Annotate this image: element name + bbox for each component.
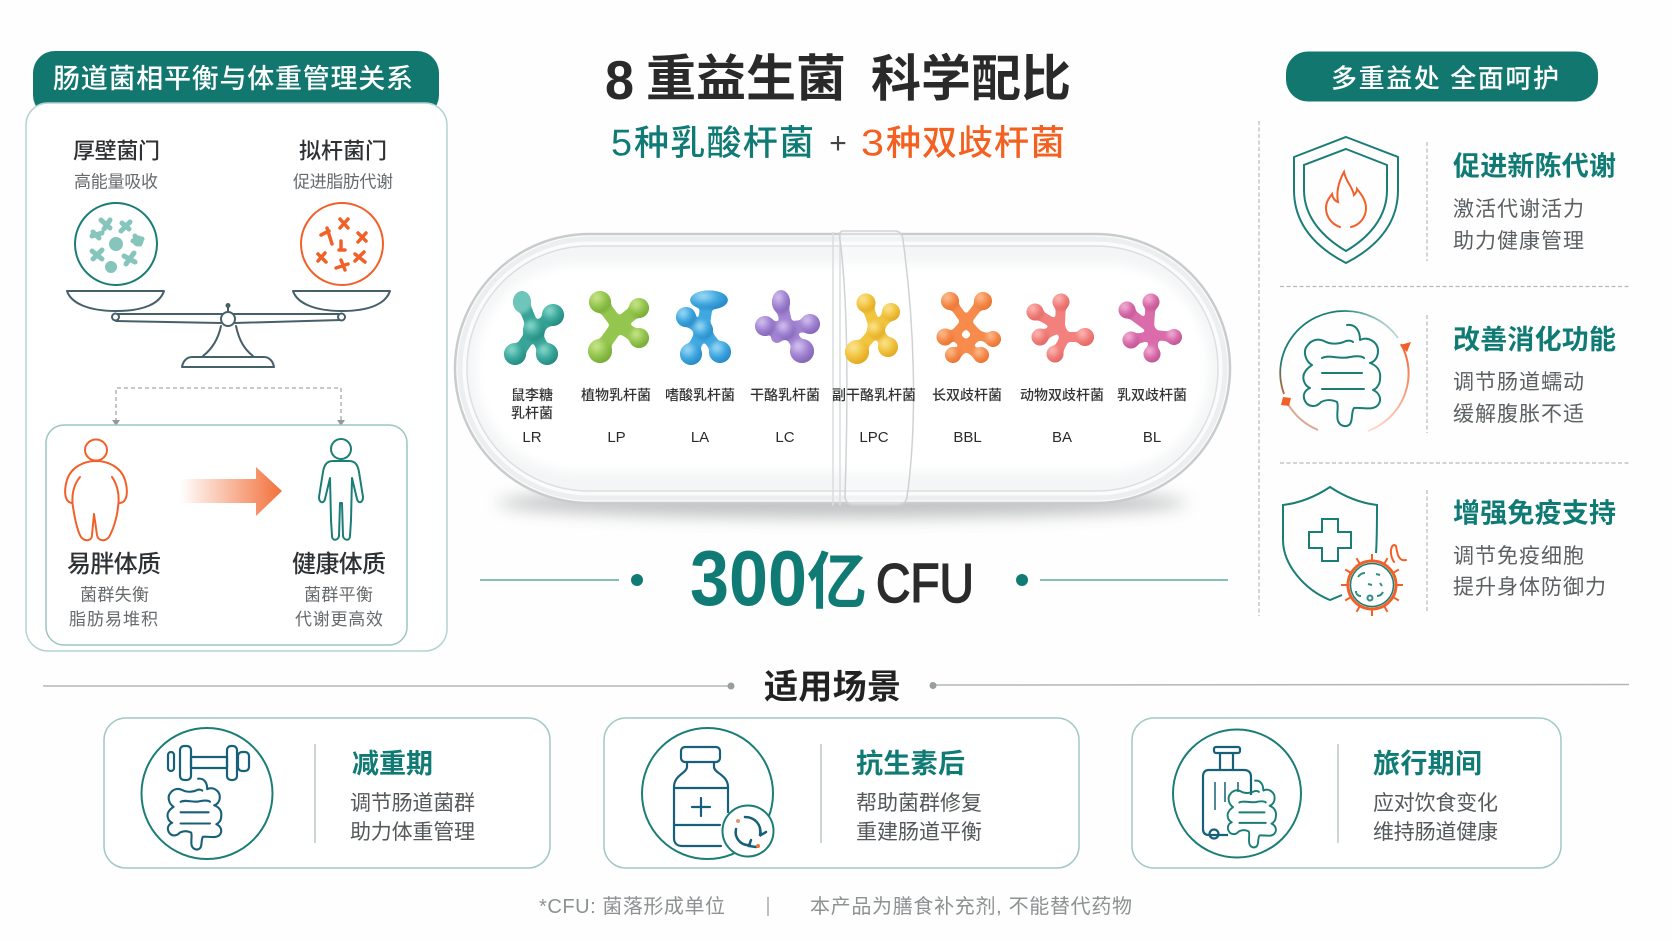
benefits heading pill: 多重益处 全面呵护 bbox=[1331, 64, 1559, 94]
icon: shield with flame bbox=[1294, 137, 1398, 263]
subtitle: 5 bbox=[611, 122, 632, 164]
Firmicutes label: 厚壁菌门 bbox=[73, 138, 160, 163]
footnote: 本产品为膳食补充剂, 不能替代药物 bbox=[810, 895, 1132, 918]
footnote bbox=[539, 895, 1132, 918]
dashed connector arrows bbox=[112, 388, 345, 426]
text: overweight constitution: 脂肪易堆积 bbox=[69, 610, 158, 629]
icon: intestine with ring bbox=[1280, 311, 1411, 431]
strain names: 动物双歧杆菌 bbox=[1020, 387, 1104, 403]
benefit: digestion bbox=[1280, 311, 1616, 431]
strain codes: LA bbox=[691, 429, 709, 446]
text: after antibiotics: 帮助菌群修复 bbox=[856, 792, 982, 815]
strain names: 植物乳杆菌 bbox=[581, 387, 651, 403]
text: immunity bbox=[1453, 498, 1616, 599]
text: after antibiotics: 抗生素后 bbox=[856, 749, 965, 779]
text: digestion: 缓解腹胀不适 bbox=[1453, 403, 1584, 426]
text: healthy constitution: 菌群平衡 bbox=[304, 586, 373, 604]
strain names: 干酪乳杆菌 bbox=[750, 387, 820, 403]
strain names: 鼠李糖 bbox=[511, 387, 553, 403]
section heading: scenarios: 适用场景 bbox=[764, 668, 901, 706]
dose callout: 30 billion CFU: CFU bbox=[876, 552, 974, 614]
text: overweight constitution: 易胖体质 bbox=[67, 551, 161, 578]
text: metabolism: 助力健康管理 bbox=[1453, 230, 1584, 253]
text: healthy constitution bbox=[292, 551, 386, 629]
icon: balance scale bbox=[67, 291, 390, 367]
bacterium LP bbox=[588, 291, 649, 363]
text: metabolism: 激活代谢活力 bbox=[1453, 198, 1584, 221]
strain names: 长双歧杆菌 bbox=[932, 387, 1002, 403]
text: healthy constitution: 代谢更高效 bbox=[295, 610, 383, 629]
capsule shadow bbox=[497, 488, 1187, 518]
strain codes: LPC bbox=[859, 429, 889, 446]
benefit: metabolism bbox=[1294, 137, 1616, 263]
text: during travel: 维持肠道健康 bbox=[1373, 821, 1498, 844]
strain names: 乳杆菌 bbox=[511, 405, 553, 421]
Bacteroidetes label bbox=[293, 138, 393, 192]
panel: gut flora balance and weight bbox=[26, 51, 447, 651]
title bbox=[605, 49, 1071, 111]
strain codes: BL bbox=[1143, 429, 1161, 446]
icon: overweight person bbox=[65, 440, 127, 540]
benefit: immunity bbox=[1283, 487, 1616, 616]
text: metabolism: 促进新陈代谢 bbox=[1453, 151, 1616, 181]
subtitle: 种乳酸杆菌 bbox=[634, 124, 814, 163]
capsule shell bbox=[455, 234, 1230, 503]
strain names: 嗜酸乳杆菌 bbox=[665, 387, 735, 403]
text: during travel: 应对饮食变化 bbox=[1373, 792, 1498, 815]
card: after antibiotics bbox=[604, 718, 1079, 868]
text: during travel bbox=[1373, 749, 1498, 844]
bacterium LPC bbox=[845, 294, 900, 364]
icon: dumbbell and intestine bbox=[142, 728, 272, 859]
strain names bbox=[511, 387, 1187, 421]
text: healthy constitution: 健康体质 bbox=[292, 551, 386, 578]
text: immunity: 调节免疫细胞 bbox=[1453, 545, 1584, 568]
subtitle: 种双歧杆菌 bbox=[886, 124, 1065, 163]
strain names: 副干酪乳杆菌 bbox=[832, 387, 916, 403]
strain codes bbox=[522, 429, 1161, 446]
text: overweight constitution bbox=[67, 551, 161, 629]
arrow: to healthy bbox=[180, 467, 282, 516]
subtitle: 3 bbox=[861, 122, 884, 164]
strain codes: LR bbox=[522, 429, 542, 446]
Bacteroidetes label: 促进脂肪代谢 bbox=[293, 172, 393, 192]
icon: orange bacteria circle bbox=[301, 203, 383, 285]
subtitle bbox=[611, 122, 1065, 164]
text: weight loss: 助力体重管理 bbox=[350, 821, 475, 844]
title: 8 bbox=[605, 49, 634, 111]
panel: benefits bbox=[1259, 52, 1629, 616]
icon: teal bacteria circle bbox=[75, 203, 157, 285]
text: weight loss: 减重期 bbox=[352, 749, 433, 779]
panel body bbox=[26, 103, 447, 651]
section heading: scenarios bbox=[43, 668, 1629, 706]
icon: shield with plus and virus bbox=[1283, 487, 1406, 616]
text: digestion: 改善消化功能 bbox=[1453, 325, 1616, 355]
card: weight loss period bbox=[104, 718, 550, 868]
title: 重益生菌 bbox=[646, 51, 846, 107]
icon: suitcase and intestine bbox=[1173, 730, 1301, 858]
text: digestion bbox=[1453, 325, 1616, 426]
text: immunity: 增强免疫支持 bbox=[1453, 498, 1616, 528]
benefits heading pill bbox=[1286, 52, 1598, 102]
title: 科学配比 bbox=[871, 51, 1071, 107]
text: metabolism bbox=[1453, 151, 1616, 253]
Firmicutes label: 高能量吸收 bbox=[74, 172, 158, 192]
bacterium LR bbox=[504, 291, 564, 365]
text: overweight constitution: 菌群失衡 bbox=[80, 586, 149, 604]
bacterium BL bbox=[1118, 294, 1182, 362]
text: digestion: 调节肠道蠕动 bbox=[1453, 371, 1584, 394]
strain codes: BBL bbox=[953, 429, 982, 446]
icon: bottle with recycle circle bbox=[642, 728, 774, 859]
strain codes: LC bbox=[775, 429, 795, 446]
bacterium BA bbox=[1026, 294, 1094, 362]
bacterium LA bbox=[676, 290, 731, 365]
Bacteroidetes label: 拟杆菌门 bbox=[299, 138, 387, 163]
strain names: 乳双歧杆菌 bbox=[1117, 387, 1187, 403]
text: after antibiotics: 重建肠道平衡 bbox=[856, 821, 982, 844]
text: weight loss bbox=[350, 749, 475, 844]
text: during travel: 旅行期间 bbox=[1373, 749, 1482, 779]
dose callout: 30 billion CFU: 300 bbox=[690, 534, 807, 622]
panel header tab bbox=[33, 51, 439, 117]
capsule with eight strains bbox=[455, 231, 1230, 518]
dose callout: 30 billion CFU: 亿 bbox=[807, 548, 867, 617]
text: weight loss: 调节肠道菌群 bbox=[350, 792, 475, 815]
card: during travel bbox=[1132, 718, 1561, 868]
bacterium BBL bbox=[936, 292, 1001, 363]
bacterium LC bbox=[755, 290, 820, 363]
icon: healthy person bbox=[319, 439, 363, 540]
subtitle: + bbox=[829, 127, 847, 160]
strain codes: BA bbox=[1052, 429, 1072, 446]
Firmicutes label bbox=[73, 138, 160, 192]
text: immunity: 提升身体防御力 bbox=[1453, 576, 1606, 599]
capsule band bbox=[833, 231, 914, 506]
footnote: *CFU: 菌落形成单位 bbox=[539, 895, 725, 918]
text: after antibiotics bbox=[856, 749, 982, 844]
panel heading: 肠道菌相平衡与体重管理关系 bbox=[53, 64, 413, 94]
strain codes: LP bbox=[607, 429, 626, 446]
dose callout: 30 billion CFU bbox=[480, 534, 1228, 622]
panel: body types box bbox=[46, 425, 407, 645]
